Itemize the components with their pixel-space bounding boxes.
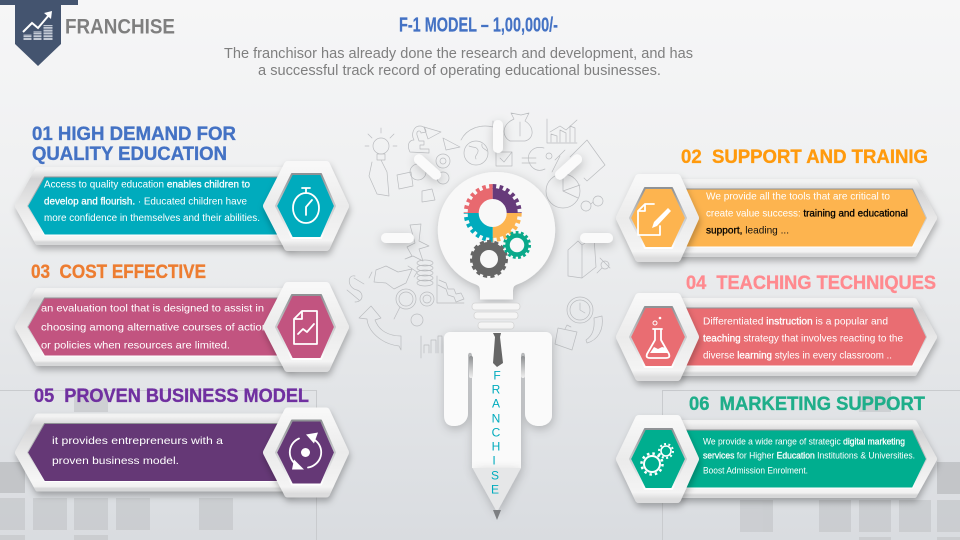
central figure: lightbulb person <box>381 120 613 520</box>
body text 06: We provide a wide range of strategic digital marketing <box>703 436 905 446</box>
vertical franchise label: F <box>493 368 501 382</box>
gears <box>466 186 530 276</box>
icon: cycle arrows <box>290 432 321 470</box>
green gear <box>504 232 530 258</box>
hexagon icon 03 <box>267 286 345 368</box>
body text 06: Boost Admission Enrolment. <box>703 466 808 476</box>
vertical franchise label: R <box>492 382 501 396</box>
doodle icons background <box>347 113 610 358</box>
intro text: The franchisor has already done the research and development, and has <box>224 46 693 62</box>
vertical franchise label <box>491 368 501 496</box>
arm slits <box>469 356 525 378</box>
vertical franchise label: N <box>492 412 500 426</box>
body text 04: teaching strategy that involves reacting to the <box>703 332 903 344</box>
hexagon icon 04 <box>620 297 695 377</box>
hexagon icon 05 <box>267 412 345 494</box>
hexagon icon 06 <box>620 419 695 499</box>
panel 05: proven business model <box>18 385 345 494</box>
banner 05 <box>18 416 292 488</box>
logo title: FRANCHISE <box>65 16 175 38</box>
body text 06 <box>703 436 915 476</box>
body text 01: Access to quality education enables children to <box>44 178 250 190</box>
icon: document chart <box>294 311 317 344</box>
banner 06 <box>680 423 934 495</box>
vertical franchise label: H <box>492 440 500 454</box>
heading 01: 01 HIGH DEMAND FOR <box>32 123 236 145</box>
body text 01: more confidence in themselves and their abilities. <box>44 212 260 224</box>
body text 03: an evaluation tool that is designed to assist in <box>41 302 264 314</box>
bulb <box>438 172 555 300</box>
body and pencil <box>444 332 552 468</box>
grey gear <box>472 242 506 276</box>
body text 05: proven business model. <box>52 455 179 467</box>
body text 06: services for Higher Education Institutions & Universities. <box>703 450 915 460</box>
vertical franchise label: E <box>491 482 499 496</box>
body text 04: Differentiated instruction is a popular and <box>703 316 888 328</box>
heading 06: 06 MARKETING SUPPORT <box>689 393 925 415</box>
icon: clipboard pencil <box>638 204 671 235</box>
coloured gear <box>466 186 519 240</box>
heading 02: 02 SUPPORT AND TRAINIG <box>681 146 928 168</box>
panel 03: cost effective <box>18 261 345 368</box>
vertical franchise label: C <box>492 426 501 440</box>
model price heading: F-1 MODEL – 1,00,000/- <box>399 14 558 36</box>
panel 06: marketing support <box>620 393 934 499</box>
body text 02: support, leading ... <box>706 224 789 236</box>
icon: flask <box>647 317 669 358</box>
banner 03 <box>18 291 292 363</box>
banner 04 <box>680 301 934 373</box>
panel 02: support and training <box>620 146 934 258</box>
vertical franchise label: I <box>492 454 496 468</box>
heading 01: QUALITY EDUCATION <box>32 143 227 165</box>
heading 04: 04 TEACHING TECHNIQUES <box>686 272 936 294</box>
body text 05 <box>52 435 223 467</box>
intro text <box>224 46 693 79</box>
heading 01 <box>32 123 236 165</box>
body text 02: create value success: training and educational <box>706 208 908 220</box>
body text 04 <box>703 316 903 362</box>
rays <box>381 120 613 243</box>
tie <box>493 333 503 367</box>
heading 05: 05 PROVEN BUSINESS MODEL <box>34 385 309 407</box>
body text 04: diverse learning styles in every classroom .. <box>703 350 892 362</box>
banner 01 <box>18 170 292 242</box>
vertical franchise label: A <box>492 396 500 410</box>
pencil tip <box>472 468 521 512</box>
body text 05: it provides entrepreneurs with a <box>52 435 223 447</box>
header ribbon with growth icon <box>0 0 78 66</box>
panel 01: high demand <box>18 123 345 247</box>
body text 03: or policies when resources are limited. <box>41 340 230 352</box>
vertical franchise label: S <box>491 468 499 482</box>
heading 03: 03 COST EFFECTIVE <box>31 261 206 283</box>
body text 03 <box>41 302 268 352</box>
body text 01 <box>44 178 260 224</box>
banner 02 <box>680 182 934 254</box>
hexagon icon 01 <box>267 165 345 247</box>
hexagon icon 02 <box>620 178 695 258</box>
body text 03: choosing among alternative courses of action <box>41 322 268 334</box>
icon: stopwatch <box>293 188 319 223</box>
icon: growth arrow and coins <box>23 11 52 40</box>
body text 02: We provide all the tools that are critical to <box>706 190 890 202</box>
body text 01: develop and flourish. · Educated children have <box>44 196 247 208</box>
icon: gears <box>642 444 673 474</box>
panel 04: teaching techniques <box>620 272 936 377</box>
body text 02 <box>706 190 908 236</box>
bulb base <box>472 303 520 329</box>
intro text: a successful track record of operating educational businesses. <box>258 63 661 79</box>
